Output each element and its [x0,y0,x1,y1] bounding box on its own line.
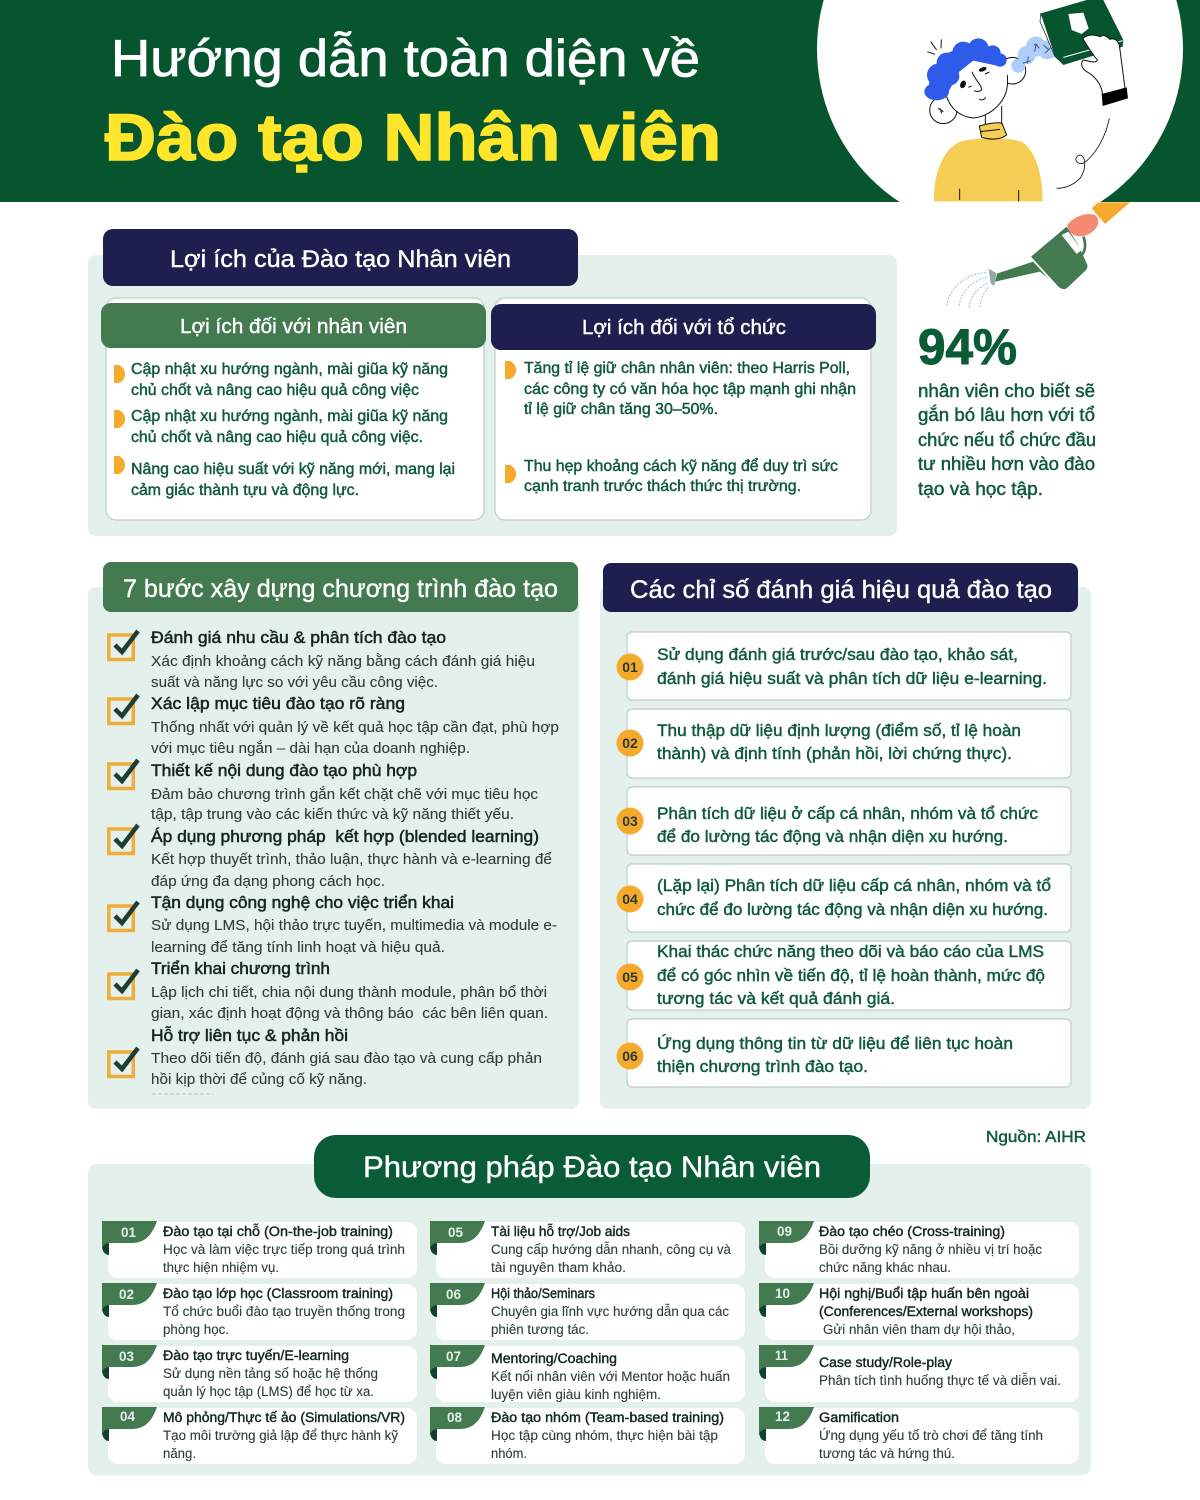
method 09 [759,1221,1079,1278]
metric 01: 01 [622,659,638,675]
step 7 [109,1026,542,1094]
title line 2: Đào tạo Nhân viên [105,100,721,174]
benefits heading [103,229,578,286]
metric 01: đánh giá hiệu suất và phân tích dữ liệu e-learning. [657,669,1047,688]
method 12: Gamification [819,1410,899,1425]
method 08: 08 [447,1409,462,1425]
method 03: 03 [119,1348,134,1364]
statistic callout: 94%: 94% [918,319,1017,375]
method 04 [102,1407,417,1464]
method 01 [102,1221,417,1278]
method 08 [430,1407,745,1464]
metric 03: Phân tích dữ liệu ở cấp cá nhân, nhóm và tổ chức [657,804,1038,823]
metric 06 [616,1019,1071,1087]
method 12: tương tác và hứng thú. [819,1446,955,1461]
metric 04: 04 [622,891,638,907]
metric 06: 06 [622,1048,638,1064]
step 4: đáp ứng đa dạng phong cách học. [151,873,385,890]
metric 05 [616,941,1071,1010]
illustration: watering can [947,202,1130,308]
method 07 [430,1345,745,1402]
method 03: Đào tạo trực tuyến/E-learning [163,1348,349,1363]
statistic callout: 94%: tạo và học tập. [918,479,1043,499]
panel: 7 steps [88,562,579,1109]
statistic callout: 94%: chức nếu tổ chức đầu [918,430,1096,450]
method 05 [430,1221,745,1278]
step 2: Xác lập mục tiêu đào tạo rõ ràng [151,695,405,713]
organisation benefit 1: các công ty có văn hóa học tập mạnh ghi nhận [524,381,856,398]
employee benefit 1 [114,361,448,399]
method 09: 09 [777,1223,792,1239]
step 5: learning để tăng tính linh hoạt và hiệu quả. [151,939,445,956]
organisation benefits heading [491,304,876,350]
method 09: chức năng khác nhau. [819,1260,951,1275]
metric 05: Khai thác chức năng theo dõi và báo cáo của LMS [657,942,1044,961]
method 01: 01 [121,1224,136,1240]
organisation benefit 1: Tăng tỉ lệ giữ chân nhân viên: theo Harris Poll, [524,360,850,377]
method 10: 10 [775,1285,790,1301]
statistic callout: 94% [918,319,1096,499]
metric 01 [616,632,1071,700]
method 07: 07 [446,1348,461,1364]
steps heading [103,562,578,612]
employee benefit 1: chủ chốt và nâng cao hiệu quả công việc [131,382,419,399]
organisation benefit 2: Thu hẹp khoảng cách kỹ năng để duy trì sức [524,457,838,475]
step 6: Triển khai chương trình [151,960,330,978]
method 10: Hội nghị/Buổi tập huấn bên ngoài [819,1286,1029,1301]
metric 03: để đo lường tác động và nhận diện xu hướng. [657,827,1008,846]
employee benefit 2: chủ chốt và nâng cao hiệu quả công việc. [131,429,423,446]
method 06: Hội thảo/Seminars [491,1286,595,1301]
step 5 [109,894,557,956]
method 07: Mentoring/Coaching [491,1351,617,1366]
panel: benefits [88,229,897,536]
method 08: Học tập cùng nhóm, thực hiện bài tập [491,1428,718,1443]
step 5: Sử dụng LMS, hội thảo trực tuyến, multimedia và module e- [151,917,557,934]
step 3: Thiết kế nội dung đào tạo phù hợp [151,762,417,780]
organisation benefit 2 [505,457,838,495]
metric 03: 03 [622,813,638,829]
method 08: Đào tạo nhóm (Team-based training) [491,1410,724,1425]
card: employee benefits [101,298,486,520]
employee benefit 3 [114,456,455,499]
metric 04 [616,864,1071,932]
method 10: Gửi nhân viên tham dự hội thảo, [823,1322,1015,1337]
metric 03 [616,787,1071,855]
source note: Nguồn: AIHR [986,1129,1086,1146]
metric 05: tương tác và kết quả đánh giá. [657,989,895,1008]
method 06 [430,1283,745,1340]
panel: evaluation metrics [600,563,1091,1109]
metric 06: Ứng dụng thông tin từ dữ liệu để liên tục hoàn [657,1034,1013,1053]
step 6: gian, xác định hoạt động và thông báo các bên liên quan. [151,1005,548,1022]
step 1 [109,629,535,691]
step 3: tập, tập trung vào các kiến thức và kỹ năng thiết yếu. [151,806,514,823]
step 6: Lập lịch chi tiết, chia nội dung thành module, phân bổ thời [151,984,547,1001]
organisation benefits heading: Lợi ích đối với tổ chức [582,317,786,339]
metric 05: để có góc nhìn về tiến độ, tỉ lệ hoàn thành, mức độ [657,966,1045,985]
metric 02: thành) và định tính (phản hồi, lời chứng thực). [657,744,1012,763]
method 12 [759,1407,1079,1464]
method 05: Tài liệu hỗ trợ/Job aids [491,1224,630,1239]
step 2 [109,695,559,757]
step 7: Hỗ trợ liên tục & phản hồi [151,1026,348,1045]
statistic callout: 94%: tư nhiều hơn vào đào [918,454,1095,474]
metric 02 [616,709,1071,778]
method 08: nhóm. [491,1446,527,1461]
metric 02: 02 [622,735,638,751]
method 09: Bồi dưỡng kỹ năng ở nhiều vị trí hoặc [819,1242,1042,1257]
statistic callout: 94%: gắn bó lâu hơn với tổ [918,404,1095,425]
method 11: Case study/Role-play [819,1355,952,1370]
method 06: Chuyên gia lĩnh vực hướng dẫn qua các [491,1304,729,1319]
illustration: person learning from a book [924,0,1128,201]
employee benefit 3: cảm giác thành tựu và động lực. [131,482,359,499]
method 01: Đào tạo tại chỗ (On-the-job training) [163,1224,393,1239]
step 3 [109,760,538,823]
organisation benefit 1: tỉ lệ giữ chân tăng 30–50%. [524,401,718,418]
step 4: Áp dụng phương pháp kết hợp (blended learning) [151,827,539,846]
method 04: năng. [163,1446,196,1461]
method 01: Học và làm việc trực tiếp trong quá trình [163,1242,405,1257]
step 5: Tận dụng công nghệ cho việc triển khai [151,894,454,912]
method 02: Tổ chức buổi đào tạo truyền thống trong [163,1304,405,1319]
method 03: Sử dụng nền tảng số hoặc hệ thống [163,1366,378,1381]
metrics heading: Các chỉ số đánh giá hiệu quả đào tạo [630,576,1052,604]
method 05: Cung cấp hướng dẫn nhanh, công cụ và [491,1242,731,1257]
method 06: 06 [446,1286,461,1302]
header banner [0,0,1200,242]
method 12: 12 [775,1408,790,1424]
metric 02: Thu thập dữ liệu định lượng (điểm số, tỉ lệ hoàn [657,721,1021,740]
benefits heading: Lợi ích của Đào tạo Nhân viên [170,246,511,273]
step 6 [109,960,548,1022]
step 1: suất và năng lực so với yêu cầu công việc. [151,674,438,691]
step 4 [109,825,552,890]
method 07: luyện viên giàu kinh nghiệm. [491,1387,661,1402]
employee benefits heading [101,303,486,348]
metric 04: chức để đo lường tác động và nhận diện xu hướng. [657,900,1048,919]
method 04: Mô phỏng/Thực tế ảo (Simulations/VR) [163,1410,405,1425]
panel: training methods [88,1135,1091,1475]
steps heading: 7 bước xây dựng chương trình đào tạo [123,575,558,603]
step 3: Đảm bảo chương trình gắn kết chặt chẽ với mục tiêu học [151,786,538,803]
method 11: Phân tích tình huống thực tế và diễn vai. [819,1373,1061,1388]
employee benefit 1: Cập nhật xu hướng ngành, mài giũa kỹ năng [131,361,448,378]
step 4: Kết hợp thuyết trình, thảo luận, thực hành và e-learning để [151,851,552,868]
step 1: Đánh giá nhu cầu & phân tích đào tạo [151,629,446,647]
metric 05: 05 [622,969,638,985]
employee benefit 2 [114,408,448,446]
organisation benefit 1 [505,360,856,418]
method 05: tài nguyên tham khảo. [491,1260,626,1275]
method 01: thực hiện nhiệm vụ. [163,1260,279,1275]
method 02 [102,1283,417,1340]
method 11: 11 [775,1347,788,1363]
metric 06: thiện chương trình đào tạo. [657,1057,868,1076]
method 10: (Conferences/External workshops) [819,1304,1033,1319]
method 10 [759,1283,1079,1340]
method 03 [102,1345,417,1402]
card: organisation benefits [491,298,876,520]
employee benefit 3: Nâng cao hiệu suất với kỹ năng mới, mang lại [131,461,455,478]
method 04: 04 [120,1408,135,1424]
method 11 [759,1345,1079,1402]
employee benefit 2: Cập nhật xu hướng ngành, mài giũa kỹ năng [131,408,448,425]
method 07: Kết nối nhân viên với Mentor hoặc huấn [491,1369,730,1384]
method 02: Đào tạo lớp học (Classroom training) [163,1286,393,1301]
method 02: phòng học. [163,1322,229,1337]
employee benefits heading: Lợi ích đối với nhân viên [180,316,407,338]
method 02: 02 [119,1286,134,1302]
organisation benefit 2: cạnh tranh trước thách thức thị trường. [524,478,801,495]
step 7: Theo dõi tiến độ, đánh giá sau đào tạo và cung cấp phản [151,1050,542,1067]
step 2: Thống nhất với quản lý về kết quả học tập cần đạt, phù hợp [151,719,559,736]
method 05: 05 [448,1224,463,1240]
step 1: Xác định khoảng cách kỹ năng bằng cách đánh giá hiệu [151,653,535,670]
step 2: với mục tiêu ngắn – dài hạn của doanh nghiệp. [151,740,470,757]
method 03: quản lý học tập (LMS) để học từ xa. [163,1384,374,1399]
methods heading: Phương pháp Đào tạo Nhân viên [363,1151,821,1184]
step 7: hồi kịp thời để củng cố kỹ năng. [151,1071,367,1088]
method 04: Tạo môi trường giả lập để thực hành kỹ [163,1428,398,1443]
method 09: Đào tạo chéo (Cross-training) [819,1224,1005,1239]
methods heading [314,1135,870,1198]
statistic callout: 94%: nhân viên cho biết sẽ [918,381,1095,401]
title line 1: Hướng dẫn toàn diện về [111,30,700,88]
method 06: phiên tương tác. [491,1322,589,1337]
metrics heading [603,563,1078,612]
metric 01: Sử dụng đánh giá trước/sau đào tạo, khảo sát, [657,645,1018,664]
method 12: Ứng dụng yếu tố trò chơi để tăng tính [819,1428,1043,1443]
metric 04: (Lặp lại) Phân tích dữ liệu cấp cá nhân, nhóm và tổ [657,876,1051,895]
